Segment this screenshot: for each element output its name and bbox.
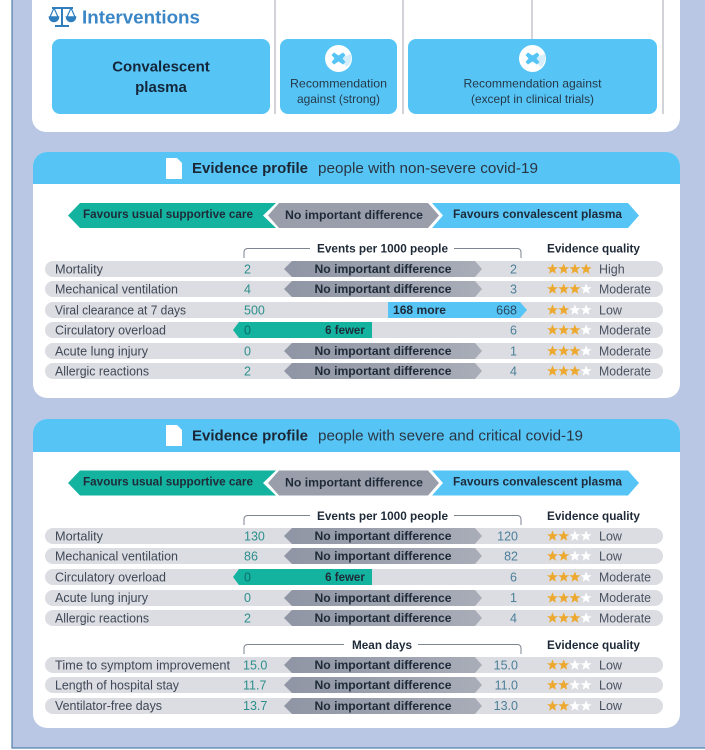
row: length of hospital stay: 11.7 (243, 678, 266, 692)
row: ventilator-free days: 13.7 (243, 699, 267, 713)
panel: severe and critical evidence profile (33, 419, 680, 728)
row: time to symptom improvement: Low (599, 658, 623, 672)
row: mechanical ventilation: 3 (510, 282, 517, 296)
row: ventilator-free days (45, 698, 663, 714)
icon: cross (519, 45, 546, 72)
row: allergic reactions: 4 (510, 364, 517, 378)
row: acute lung injury: Acute lung injury (55, 344, 149, 358)
row: circulatory overload: Circulatory overload (55, 324, 166, 338)
row: acute lung injury: 1 (510, 591, 517, 605)
row: acute lung injury (45, 590, 663, 606)
row: mechanical ventilation (45, 548, 663, 564)
row: acute lung injury: Acute lung injury (55, 591, 149, 605)
legend arrows (68, 203, 639, 228)
legend arrows: Favours usual supportive care (83, 476, 253, 488)
row: circulatory overload: 6 fewer (325, 572, 365, 584)
row: acute lung injury: 0 (244, 344, 251, 358)
icon: scales (50, 7, 76, 26)
row: allergic reactions: No important difference (314, 613, 452, 625)
row: length of hospital stay: Low (599, 678, 623, 692)
row: viral clearance: 168 more (393, 305, 446, 317)
header band (33, 419, 680, 452)
row: circulatory overload (45, 569, 663, 585)
row: circulatory overload: 6 fewer (325, 325, 365, 337)
row: length of hospital stay: 11.0 (495, 678, 518, 692)
row: circulatory overload (45, 322, 663, 338)
row: mechanical ventilation: Moderate (599, 282, 651, 296)
row: time to symptom improvement: No important difference (314, 660, 452, 672)
row: length of hospital stay: Length of hospital stay (55, 678, 180, 692)
row: ventilator-free days: Low (599, 699, 623, 713)
row: mortality: No important difference (314, 531, 452, 543)
row: circulatory overload: 0 (244, 324, 251, 338)
box: recommendation against except in trials: (except in clinical trials) (471, 92, 594, 106)
box: recommendation against strong: Recommendation (290, 76, 387, 90)
row: acute lung injury: No important difference (314, 346, 452, 358)
row: time to symptom improvement: 15.0 (494, 658, 518, 672)
row: acute lung injury: 0 (244, 591, 251, 605)
legend arrows (68, 470, 639, 496)
row: mortality: 130 (244, 530, 265, 544)
row: allergic reactions: Allergic reactions (55, 612, 149, 626)
row: viral clearance: Low (599, 304, 623, 318)
row: acute lung injury: No important difference (314, 593, 452, 605)
row: mortality: No important difference (314, 264, 452, 276)
legend arrows: Favours convalescent plasma (453, 476, 623, 488)
row: circulatory overload: 6 (510, 324, 517, 338)
legend arrows: No important difference (285, 210, 423, 222)
legend arrows: Favours usual supportive care (83, 209, 253, 221)
row: time to symptom improvement: Time to symptom improvement (55, 658, 231, 672)
row: acute lung injury: Moderate (599, 591, 651, 605)
icon: document (166, 158, 182, 179)
column headers: events: Evidence quality (547, 511, 641, 523)
row: circulatory overload: 6 (510, 570, 517, 584)
row: viral clearance (45, 302, 663, 318)
box: convalescent plasma: Convalescent (112, 58, 210, 76)
box: recommendation against strong: against (strong) (297, 92, 380, 106)
row: allergic reactions: Allergic reactions (55, 364, 149, 378)
row: acute lung injury: 1 (510, 344, 517, 358)
row: circulatory overload: Circulatory overload (55, 570, 166, 584)
column headers (244, 244, 641, 258)
row: mortality: Low (599, 530, 623, 544)
row: viral clearance: 668 (496, 304, 517, 318)
row: mortality: High (599, 262, 625, 276)
column headers: mean days: Mean days (352, 640, 412, 652)
panel: interventions (32, 0, 680, 132)
heading: evidence profile: Evidence profile (192, 428, 308, 444)
row: mortality: Mortality (55, 262, 104, 276)
row: allergic reactions: Moderate (599, 364, 651, 378)
icon: document (166, 425, 182, 446)
row: allergic reactions: Moderate (599, 612, 651, 626)
column headers: events (244, 511, 641, 525)
legend arrows: No important difference (285, 478, 423, 490)
subheading: people with severe and critical covid-19 (318, 428, 583, 444)
row: mechanical ventilation (45, 281, 663, 297)
legend arrows: Favours convalescent plasma (453, 209, 623, 221)
icon: cross (325, 45, 352, 72)
column headers: Events per 1000 people (317, 244, 448, 256)
panel: non-severe evidence profile (33, 152, 680, 398)
header band (33, 152, 680, 184)
row: mortality: 120 (497, 530, 518, 544)
column headers: mean days (244, 640, 641, 654)
column headers: Evidence quality (547, 244, 641, 256)
row: allergic reactions: 2 (244, 364, 251, 378)
row: mortality: Mortality (55, 530, 104, 544)
row: allergic reactions (45, 610, 663, 626)
row: time to symptom improvement: 15.0 (243, 658, 267, 672)
row: allergic reactions: 2 (244, 612, 251, 626)
row: length of hospital stay: No important difference (314, 680, 452, 692)
row: mechanical ventilation: Mechanical ventilation (55, 550, 178, 564)
subheading: people with non-severe covid-19 (318, 161, 538, 177)
row: mechanical ventilation: 4 (244, 282, 251, 296)
row: length of hospital stay (45, 677, 663, 693)
row: mortality: 2 (510, 262, 517, 276)
column headers: mean days: Evidence quality (547, 640, 641, 652)
box: recommendation against strong (280, 39, 397, 114)
box: convalescent plasma (52, 39, 270, 114)
row: mechanical ventilation: 86 (244, 550, 258, 564)
row: mechanical ventilation: No important difference (314, 284, 452, 296)
heading: interventions: Interventions (82, 6, 200, 28)
row: mortality: 2 (244, 262, 251, 276)
row: allergic reactions: 4 (510, 612, 517, 626)
row: ventilator-free days: 13.0 (494, 699, 518, 713)
row: viral clearance: Viral clearance at 7 days (55, 304, 186, 318)
row: mortality (45, 528, 663, 544)
row: mechanical ventilation: Low (599, 550, 623, 564)
box: recommendation against except in trials: Recommendation against (464, 76, 602, 90)
box: recommendation against except in trials (408, 39, 657, 114)
row: viral clearance: 500 (244, 304, 265, 318)
row: time to symptom improvement (45, 657, 663, 673)
row: ventilator-free days: No important difference (314, 701, 452, 713)
row: mechanical ventilation: 82 (504, 550, 518, 564)
row: circulatory overload: Moderate (599, 570, 651, 584)
heading: evidence profile: Evidence profile (192, 161, 308, 177)
row: mortality (45, 261, 663, 277)
row: acute lung injury (45, 343, 663, 359)
row: circulatory overload: 0 (244, 570, 251, 584)
row: mechanical ventilation: Mechanical ventilation (55, 282, 178, 296)
row: allergic reactions (45, 363, 663, 379)
row: circulatory overload: Moderate (599, 324, 651, 338)
row: acute lung injury: Moderate (599, 344, 651, 358)
row: mechanical ventilation: No important difference (314, 551, 452, 563)
box: convalescent plasma: plasma (135, 79, 188, 96)
row: allergic reactions: No important difference (314, 366, 452, 378)
column headers: events: Events per 1000 people (317, 511, 448, 523)
row: ventilator-free days: Ventilator-free days (55, 699, 162, 713)
